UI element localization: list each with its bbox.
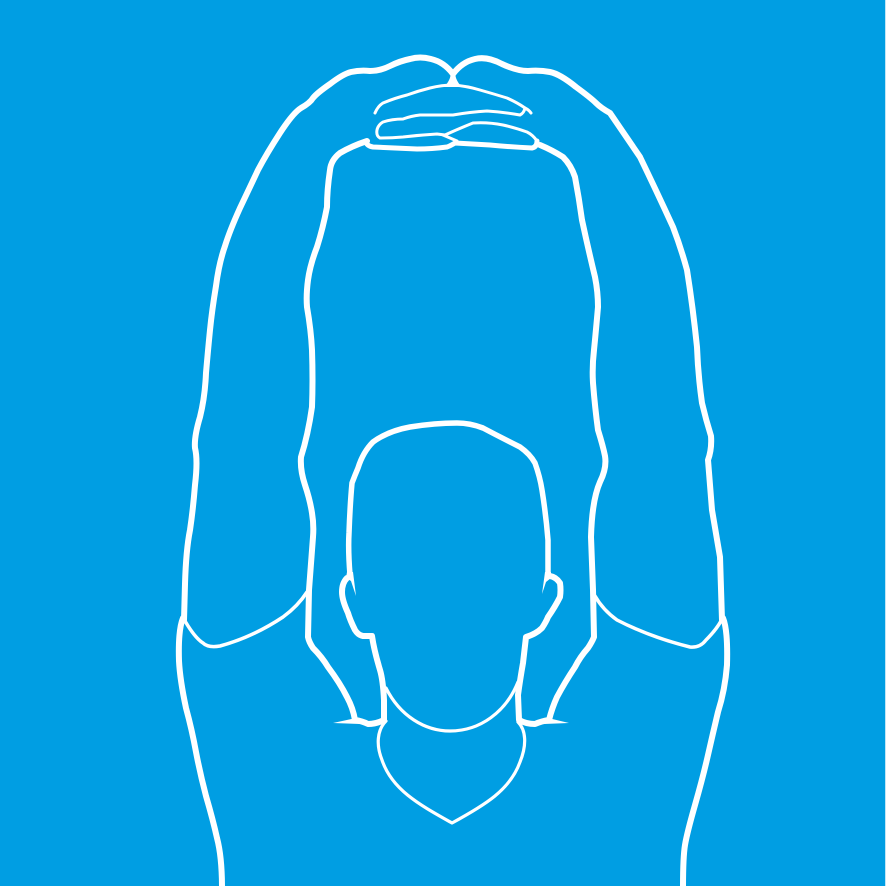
neckline <box>378 721 525 823</box>
right sleeve crease <box>595 596 721 647</box>
left shoulder collar tip <box>333 718 360 724</box>
left torso side <box>179 618 222 886</box>
right inner arm, shoulder and ear <box>518 145 605 724</box>
chin line <box>386 682 518 731</box>
left sleeve crease <box>185 592 307 647</box>
palm and finger contours <box>377 108 537 141</box>
joined hands lower edge <box>366 141 537 149</box>
head outline <box>349 423 548 575</box>
right torso side <box>683 618 727 886</box>
fingertip divide between hands <box>444 69 462 87</box>
left inner arm, shoulder and ear <box>301 141 384 724</box>
right shoulder collar tip <box>544 718 569 724</box>
left arm outer contour <box>184 58 453 620</box>
right image edge <box>885 0 886 886</box>
right arm outer contour <box>453 58 722 620</box>
figure outline <box>179 58 727 886</box>
left hairline taper <box>346 572 356 596</box>
upper finger contours <box>375 85 531 113</box>
crossing finger line <box>443 135 457 141</box>
right hairline taper <box>542 572 551 594</box>
